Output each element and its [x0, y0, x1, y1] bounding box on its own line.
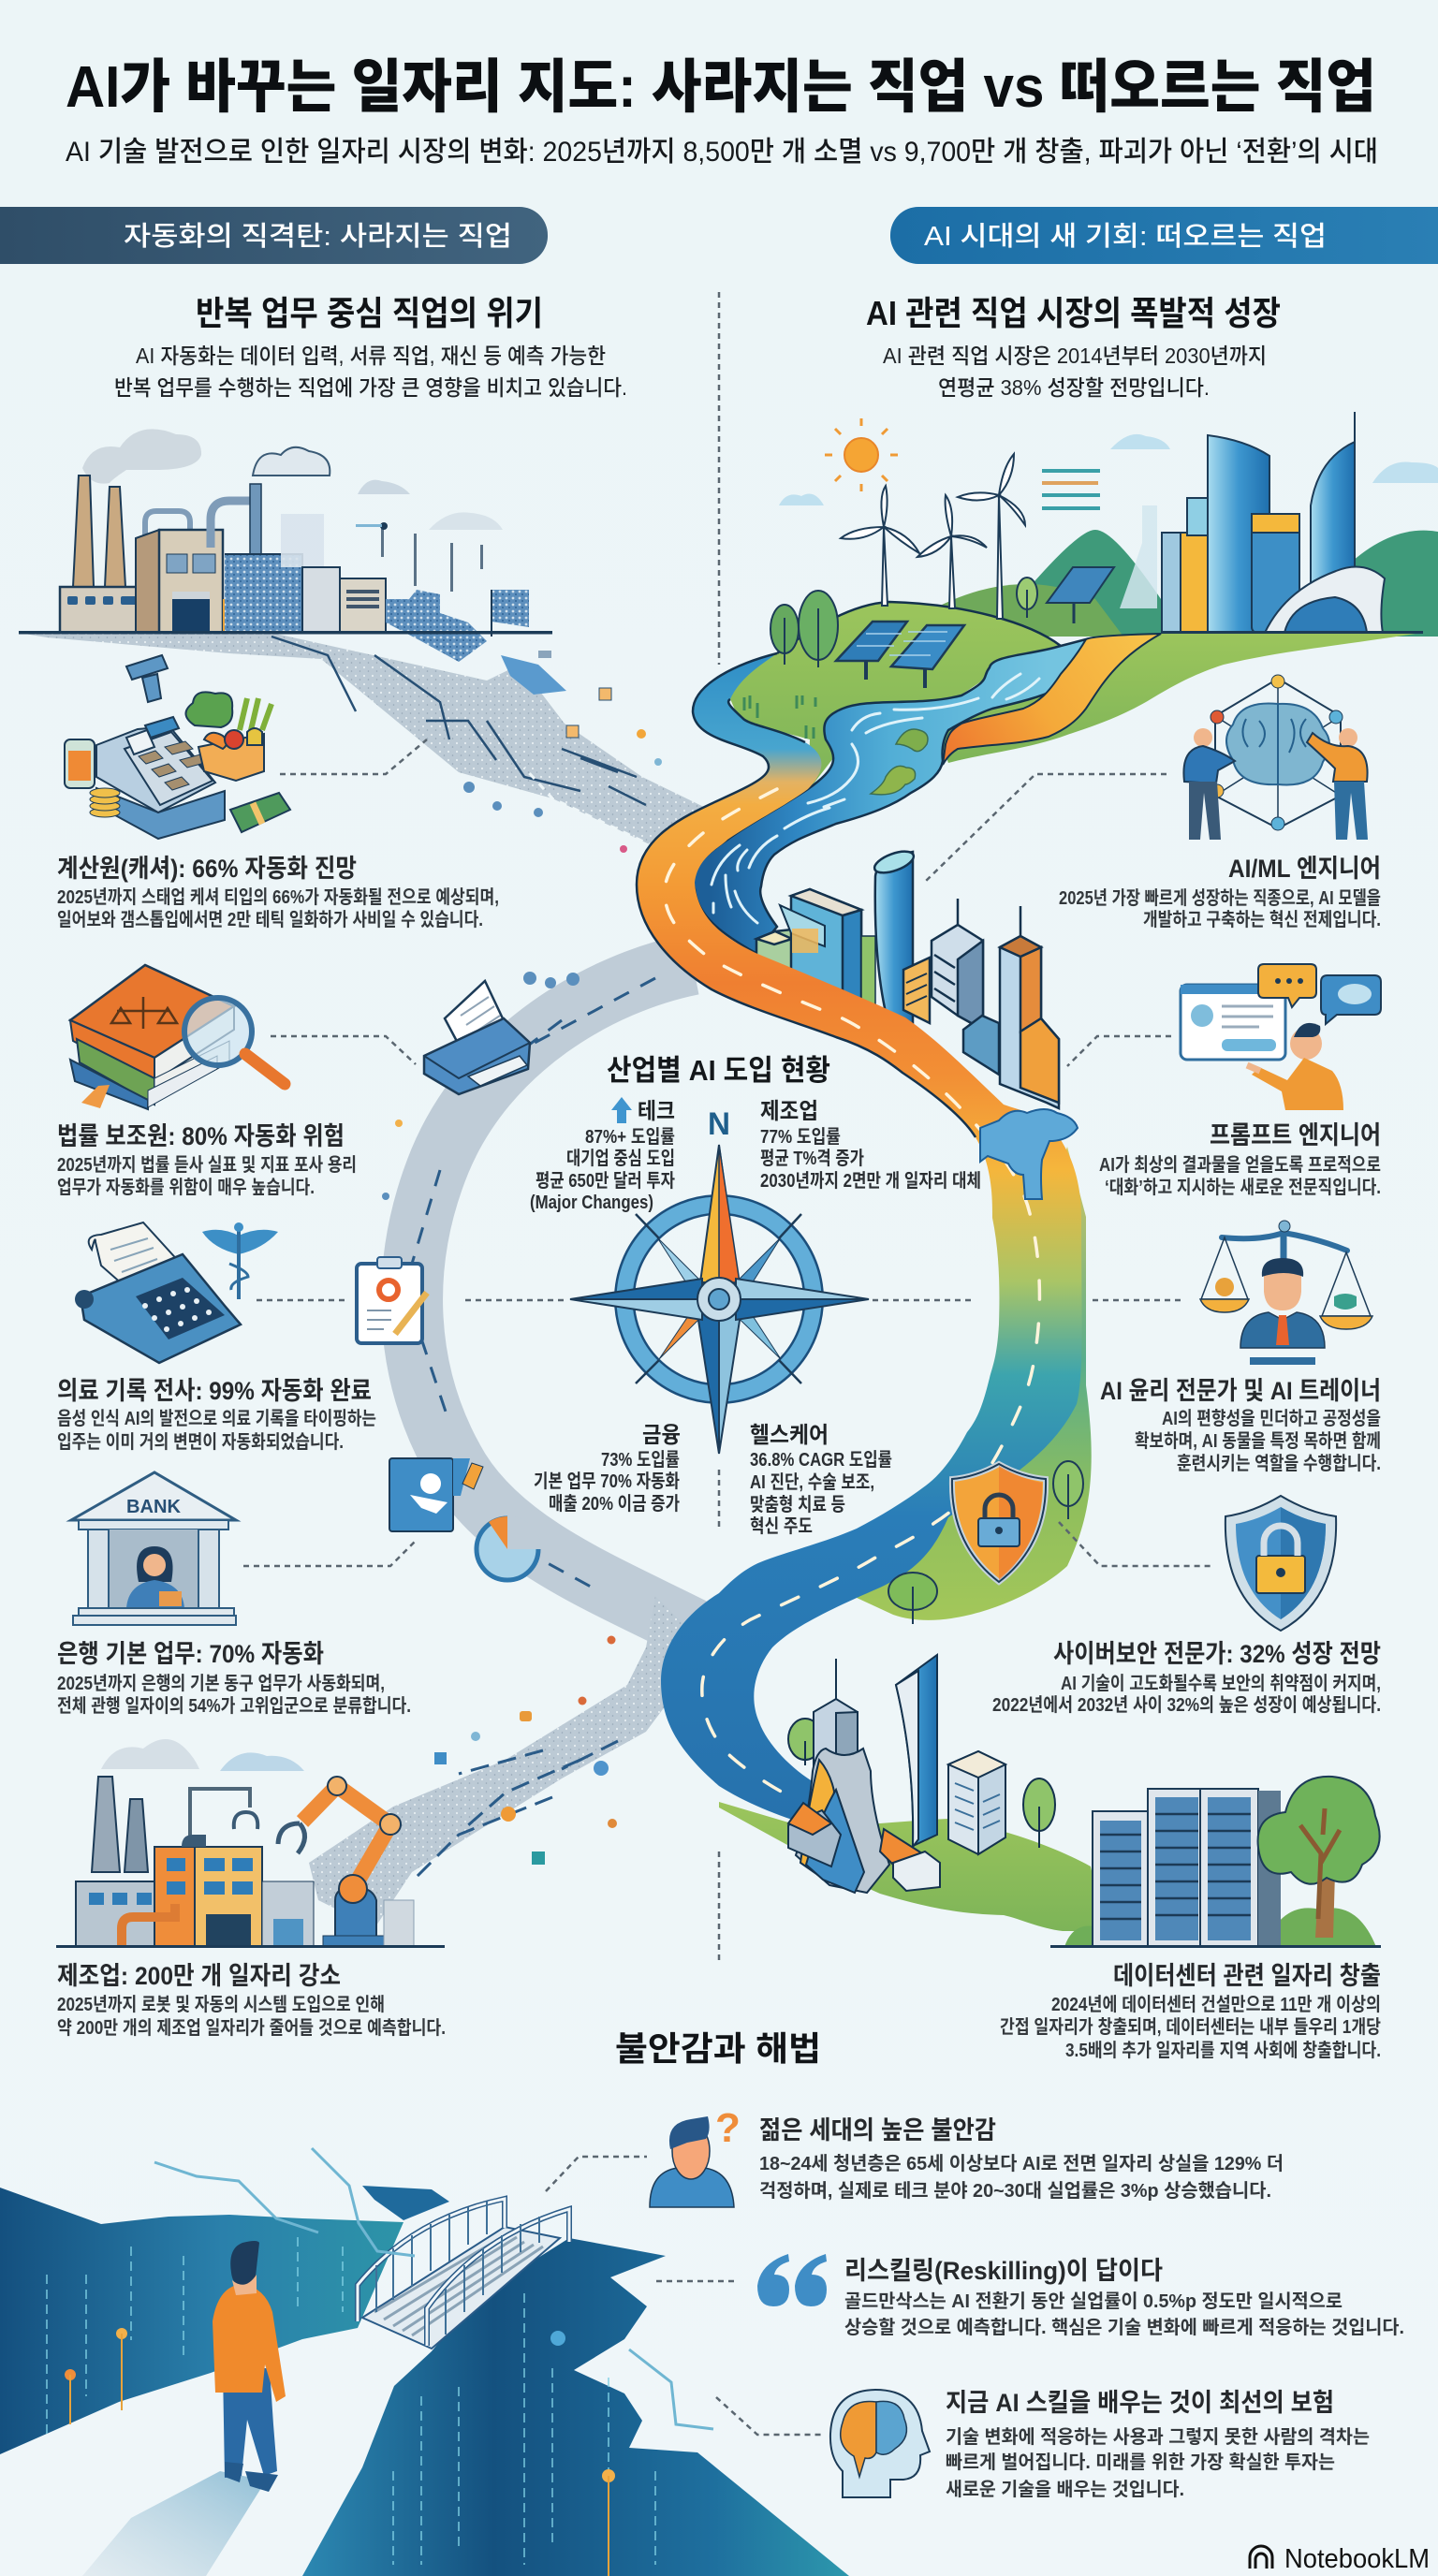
icon: clipboard — [357, 1257, 427, 1343]
icon: printer — [424, 981, 530, 1094]
green land: lower — [719, 1802, 1105, 1931]
text: legal assistant: 법률 보조원: 80% 자동화 위험 — [57, 1122, 345, 1150]
grey road: circular arc around compass — [382, 964, 693, 1629]
text: AI skills: 지금 AI 스킬을 배우는 것이 최선의 보험 — [946, 2389, 1334, 2417]
text block: right intro: AI 관련 직업 시장의 폭발적 성장 — [866, 294, 1281, 332]
text: AI ethics: 확보하며, AI 동물을 특정 목하면 함께 — [1135, 1430, 1381, 1452]
text: AI ethics: 훈련시키는 역할을 수행합니다. — [1177, 1453, 1381, 1474]
connector — [271, 1036, 416, 1064]
title: AI가 바꾸는 일자리 지도: 사라지는 직업 vs 떠오르는 직업 — [66, 55, 1376, 120]
text: medical transcription: 의료 기록 전사: 99% 자동화 완료 — [57, 1377, 372, 1405]
text: reskilling — [844, 2257, 1404, 2338]
text: bank: 2025년까지 은행의 기본 동구 업무가 사동화되며, — [57, 1673, 385, 1694]
text: AI skills: 기술 변화에 적응하는 사용과 그렇지 못한 사람의 격차는 — [946, 2426, 1370, 2448]
connector — [280, 739, 427, 774]
text: finance — [534, 1423, 681, 1515]
text: cybersecurity: 2022년에서 2032년 사이 32%의 높은 성장이 예상됩니다. — [992, 1694, 1381, 1716]
text: data center: 간접 일자리가 창출되며, 데이터센터는 내부 들우리 1개당 — [1000, 2016, 1381, 2038]
illustration: typewriter — [75, 1222, 241, 1363]
text: manufacturing: 77% 도입률 — [760, 1126, 841, 1148]
text: AI/ML engineer: 2025년 가장 빠르게 성장하는 직종으로, AI 모델을 — [1059, 887, 1381, 909]
text: manufacturing: 제조업 — [760, 1099, 818, 1124]
text: healthcare: 혁신 주도 — [750, 1515, 813, 1537]
icon: puzzle piece — [389, 1458, 483, 1531]
grey crumbling road: lower — [309, 1596, 688, 1928]
illustration: data center and tree — [1050, 1777, 1381, 1948]
icon: worried young person: ? — [715, 2105, 741, 2151]
text: bank: 전체 관행 일자이의 54%가 고위입군으로 분류합니다. — [57, 1695, 411, 1717]
text: data center: 3.5배의 추가 일자리를 지역 사회에 창출합니다. — [1065, 2040, 1381, 2061]
text: AI/ML engineer — [1059, 855, 1381, 930]
icon: caduceus — [202, 1222, 278, 1299]
text: prompt engineer — [1099, 1121, 1381, 1198]
text: prompt engineer: ‘대화’하고 지시하는 새로운 전문직입니다. — [1105, 1177, 1381, 1198]
illustration: law books and magnifier — [70, 965, 285, 1109]
text block: right intro: 연평균 38% 성장할 전망입니다. — [938, 375, 1210, 400]
text: cybersecurity — [992, 1640, 1381, 1716]
illustration: city on road — [756, 847, 1059, 1108]
text: AI ethics — [1100, 1377, 1381, 1474]
illustration: chasm, bridge and person — [0, 2148, 849, 2576]
text: data center: 데이터센터 관련 일자리 창출 — [1113, 1962, 1381, 1990]
icon: blue splash — [980, 1109, 1078, 1199]
illustration: upper left factory — [19, 429, 566, 695]
text: finance: 매출 20% 이금 증가 — [549, 1493, 680, 1515]
text: manufacturing — [760, 1099, 981, 1192]
icon: quote marks — [757, 2254, 827, 2306]
text: data center: 2024년에 데이터센터 건설만으로 11만 개 이상의 — [1051, 1994, 1381, 2015]
text: young generation anxiety: 18~24세 청년층은 65세 이상보다 AI로 전면 일자리 상실을 129% 더 — [759, 2153, 1284, 2174]
text: healthcare: AI 진단, 수술 보조, — [750, 1471, 874, 1493]
text: AI ethics: AI의 편향성을 민더하고 공정성을 — [1162, 1408, 1381, 1429]
icon: orange shield — [952, 1464, 1046, 1582]
connector — [243, 1539, 418, 1566]
NotebookLM logo: NotebookLM — [1284, 2544, 1430, 2574]
text: cybersecurity: 사이버보안 전문가: 32% 성장 전망 — [1053, 1640, 1381, 1668]
grey crumbling road: upper — [19, 633, 712, 853]
text: cashier — [57, 855, 499, 930]
text: cybersecurity: AI 기술이 고도화될수록 보안의 취약점이 커지며, — [1061, 1673, 1381, 1694]
text block: left intro: AI 자동화는 데이터 입력, 서류 직업, 재신 등 예측 가능한 — [136, 344, 606, 368]
text: tech: 87%+ 도입률 — [585, 1126, 675, 1148]
illustration: cash register — [65, 655, 290, 839]
banner: emerging jobs: AI 시대의 새 기회: 떠오르는 직업 — [924, 221, 1327, 252]
illustration: bank: BANK — [126, 1497, 182, 1517]
blue river with pool and islands — [693, 639, 1086, 953]
text block: right intro — [866, 294, 1281, 400]
text: AI skills: 빠르게 벌어집니다. 미래를 위한 가장 확실한 투자는 — [946, 2452, 1335, 2473]
text: AI ethics: AI 윤리 전문가 및 AI 트레이너 — [1100, 1377, 1381, 1405]
text: prompt engineer: AI가 최상의 결과물을 얻을도록 프로적으로 — [1099, 1154, 1381, 1176]
text block: left intro: 반복 업무를 수행하는 직업에 가장 큰 영향을 비치고 있습니다. — [114, 375, 627, 400]
icon: worried young person — [650, 2105, 741, 2207]
text: medical transcription: 입주는 이미 거의 변면이 자동화되었습니다. — [57, 1431, 344, 1453]
text: medical transcription — [57, 1377, 376, 1453]
banner: disappearing jobs — [0, 207, 548, 264]
text: tech: (Major Changes) — [530, 1193, 653, 1213]
text: legal assistant: 업무가 자동화를 위함이 매우 높습니다. — [57, 1177, 315, 1198]
text: bank — [57, 1640, 411, 1717]
text: healthcare: 36.8% CAGR 도입률 — [750, 1449, 892, 1471]
text: cashier: 2025년까지 스태업 케셔 티입의 66%가 자동화될 전으로 예상되며, — [57, 886, 499, 908]
text: young generation anxiety — [759, 2116, 1284, 2202]
connector — [923, 774, 1167, 884]
text: reskilling: 리스킬링(Reskilling)이 답이다 — [844, 2257, 1163, 2285]
illustration: bank — [71, 1472, 236, 1625]
text: manufacturing: 2030년까지 2면만 개 일자리 대체 — [760, 1170, 981, 1192]
orange road ribbon at top — [943, 634, 1161, 765]
banner: emerging jobs — [890, 207, 1438, 264]
text: healthcare — [750, 1423, 892, 1537]
text: compass N: N — [708, 1106, 730, 1142]
text: reskilling: 상승할 것으로 예측합니다. 핵심은 기술 변화에 빠르게 적응하는 것입니다. — [844, 2317, 1404, 2338]
coloured road: main winding path — [637, 653, 1082, 1825]
connector — [1067, 1036, 1171, 1066]
icon: up arrow — [611, 1097, 632, 1123]
text: young generation anxiety: 걱정하며, 실제로 테크 분야 20~30대 실업률은 3%p 상승했습니다. — [759, 2180, 1271, 2202]
illustration: lower factory with robot arm — [56, 1739, 445, 1948]
connector — [546, 2157, 821, 2435]
text: cashier: 일어보와 갬스톱입에서면 2만 테틱 일화하가 사비일 수 있습니다. — [57, 909, 483, 930]
connectors — [257, 1299, 1182, 1301]
text: manufacturing: 평균 T%격 증가 — [760, 1148, 864, 1169]
icon: head with brain — [830, 2390, 930, 2497]
text: legal assistant: 2025년까지 법률 듣사 실표 및 지표 포사 용리 — [57, 1154, 357, 1176]
text: legal assistant — [57, 1122, 357, 1198]
connector — [1059, 1522, 1211, 1566]
green land: upper right hills — [726, 530, 1438, 791]
text: medical transcription: 음성 인식 AI의 발전으로 의료 기록을 타이핑하는 — [57, 1408, 376, 1429]
text: manufacturing: 2025년까지 로봇 및 자동의 시스템 도입으로 인해 — [57, 1994, 385, 2015]
heading: adoption by industry: 산업별 AI 도입 현황 — [607, 1054, 830, 1087]
text: bank: 은행 기본 업무: 70% 자동화 — [57, 1640, 324, 1668]
banner: disappearing jobs: 자동화의 직격탄: 사라지는 직업 — [124, 221, 512, 252]
text: AI/ML engineer: 개발하고 구축하는 혁신 전제입니다. — [1143, 909, 1381, 930]
text: finance: 금융 — [642, 1423, 681, 1448]
text: tech: 평균 650만 달러 투자 — [536, 1170, 675, 1192]
text: healthcare: 헬스케어 — [750, 1423, 829, 1448]
text: tech: 대기업 중심 도입 — [566, 1148, 675, 1169]
icon: pie — [477, 1515, 541, 1580]
text: AI skills: 새로운 기술을 배우는 것입니다. — [946, 2479, 1184, 2500]
illustration: lower city — [788, 1655, 1055, 1893]
illustration: AI/ML engineers and brain — [1183, 675, 1368, 840]
text block: left intro: 반복 업무 중심 직업의 위기 — [196, 294, 543, 332]
illustration: prompt engineer — [1181, 964, 1381, 1110]
text: data center — [1000, 1962, 1381, 2061]
text: tech: 테크 — [638, 1099, 675, 1124]
text: AI skills — [946, 2389, 1370, 2500]
text block: left intro — [114, 294, 627, 400]
text: healthcare: 맞춤형 치료 등 — [750, 1494, 845, 1515]
heading: anxiety and solutions: 불안감과 해법 — [615, 2029, 821, 2068]
text: prompt engineer: 프롬프트 엔지니어 — [1210, 1121, 1381, 1149]
text: finance: 기본 업무 70% 자동화 — [534, 1471, 680, 1492]
icon: blue shield — [1225, 1496, 1336, 1631]
text block: right intro: AI 관련 직업 시장은 2014년부터 2030년까지 — [883, 344, 1267, 368]
text: young generation anxiety: 젊은 세대의 높은 불안감 — [759, 2116, 996, 2144]
text: manufacturing — [57, 1962, 446, 2039]
panel: compass and industry adoption — [530, 1054, 981, 1537]
green margin along road — [843, 1147, 1092, 1620]
icons: trees near shield — [888, 1461, 1083, 1624]
text: AI/ML engineer: AI/ML 엔지니어 — [1228, 855, 1381, 883]
text: finance: 73% 도입률 — [601, 1449, 680, 1471]
text: manufacturing: 약 200만 개의 제조업 일자리가 줄어들 것으로 예측합니다. — [57, 2017, 446, 2039]
illustration: solar, wind, sun landscape — [770, 412, 1438, 688]
text: manufacturing: 제조업: 200만 개 일자리 강소 — [57, 1962, 341, 1990]
text: cashier: 계산원(캐셔): 66% 자동화 진망 — [57, 855, 357, 883]
text: tech — [530, 1099, 675, 1213]
text: reskilling: 골드만삭스는 AI 전환기 동안 실업률이 0.5%p 정도만 일시적으로 — [844, 2291, 1343, 2312]
icon: compass — [570, 1145, 869, 1454]
subtitle: AI 기술 발전으로 인한 일자리 시장의 변화: 2025년까지 8,500만 개 소멸 vs 9,700만 개 창출, 파괴가 아닌 ‘전환’의 시대 — [66, 137, 1378, 168]
illustration: AI ethics scales — [1200, 1221, 1372, 1365]
